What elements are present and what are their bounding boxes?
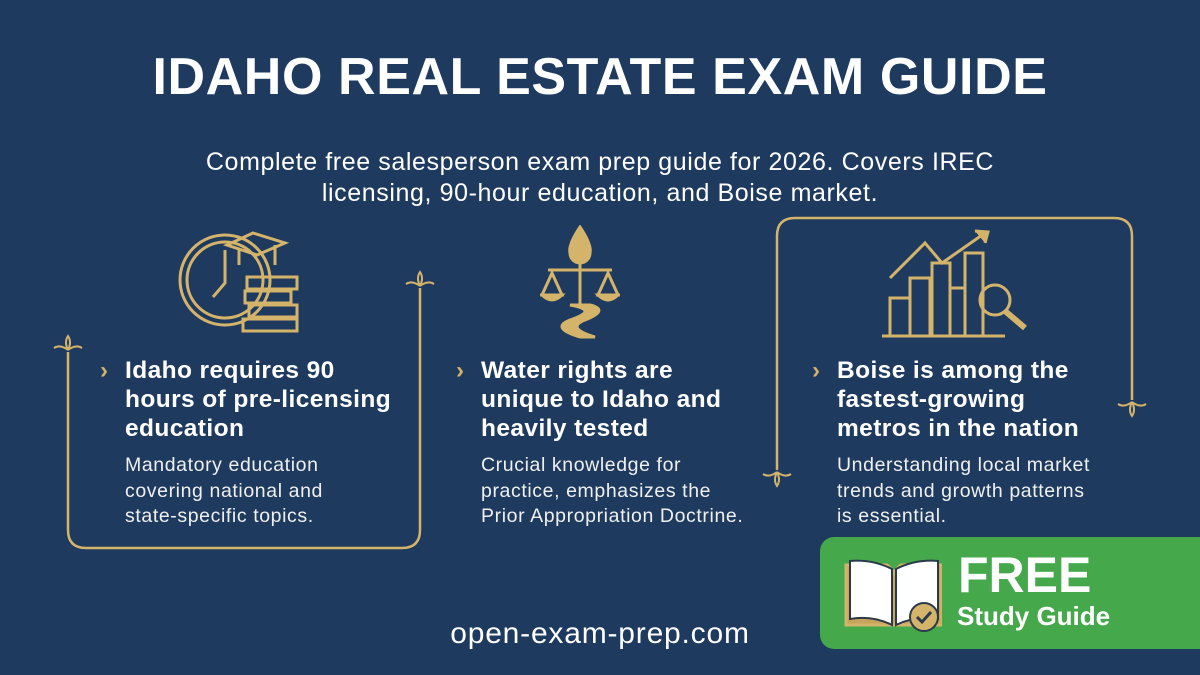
column 1 text <box>100 357 391 527</box>
column 2 text: unique to Idaho and <box>481 386 721 413</box>
column 1 text: education <box>125 415 244 442</box>
column 1 text: state-specific topics. <box>125 505 314 527</box>
column 1 text: covering national and <box>125 480 323 502</box>
column 3 text: Boise is among the <box>837 357 1069 384</box>
icon: scales and river <box>540 225 620 338</box>
column 2 text: Crucial knowledge for <box>481 454 681 476</box>
column 1 text: Mandatory education <box>125 454 319 476</box>
title: IDAHO REAL ESTATE EXAM GUIDE <box>152 48 1048 106</box>
subtitle: Complete free salesperson exam prep guide for 2026. Covers IREC <box>206 148 994 176</box>
subtitle <box>206 148 994 207</box>
footer url: open-exam-prep.com <box>450 617 750 650</box>
column 2 text: Prior Appropriation Doctrine. <box>481 505 743 527</box>
column 2 text: Water rights are <box>481 357 673 384</box>
column 3 text: trends and growth patterns <box>837 480 1085 502</box>
column 3 text: Understanding local market <box>837 454 1090 476</box>
column 3 text: metros in the nation <box>837 415 1079 442</box>
column 2 text: heavily tested <box>481 415 649 442</box>
column 2 text: › <box>456 357 464 384</box>
column 3 text: is essential. <box>837 505 947 527</box>
badge text: FREE <box>958 547 1091 603</box>
column 1 text: › <box>100 357 108 384</box>
icon: city growth <box>882 230 1027 338</box>
column 2 text: practice, emphasizes the <box>481 480 711 502</box>
icon: clock and books <box>178 231 298 332</box>
column 1 text: Idaho requires 90 <box>125 357 335 384</box>
column 2 text <box>456 357 743 527</box>
column 1 text: hours of pre-licensing <box>125 386 391 413</box>
badge: free study guide <box>820 537 1200 649</box>
subtitle: licensing, 90-hour education, and Boise market. <box>322 179 878 207</box>
badge: free study guide: Study Guide <box>957 601 1110 631</box>
icon: book <box>844 560 942 632</box>
column 3 text: fastest-growing <box>837 386 1025 413</box>
column 3 text <box>812 357 1090 527</box>
column 3 text: › <box>812 357 820 384</box>
